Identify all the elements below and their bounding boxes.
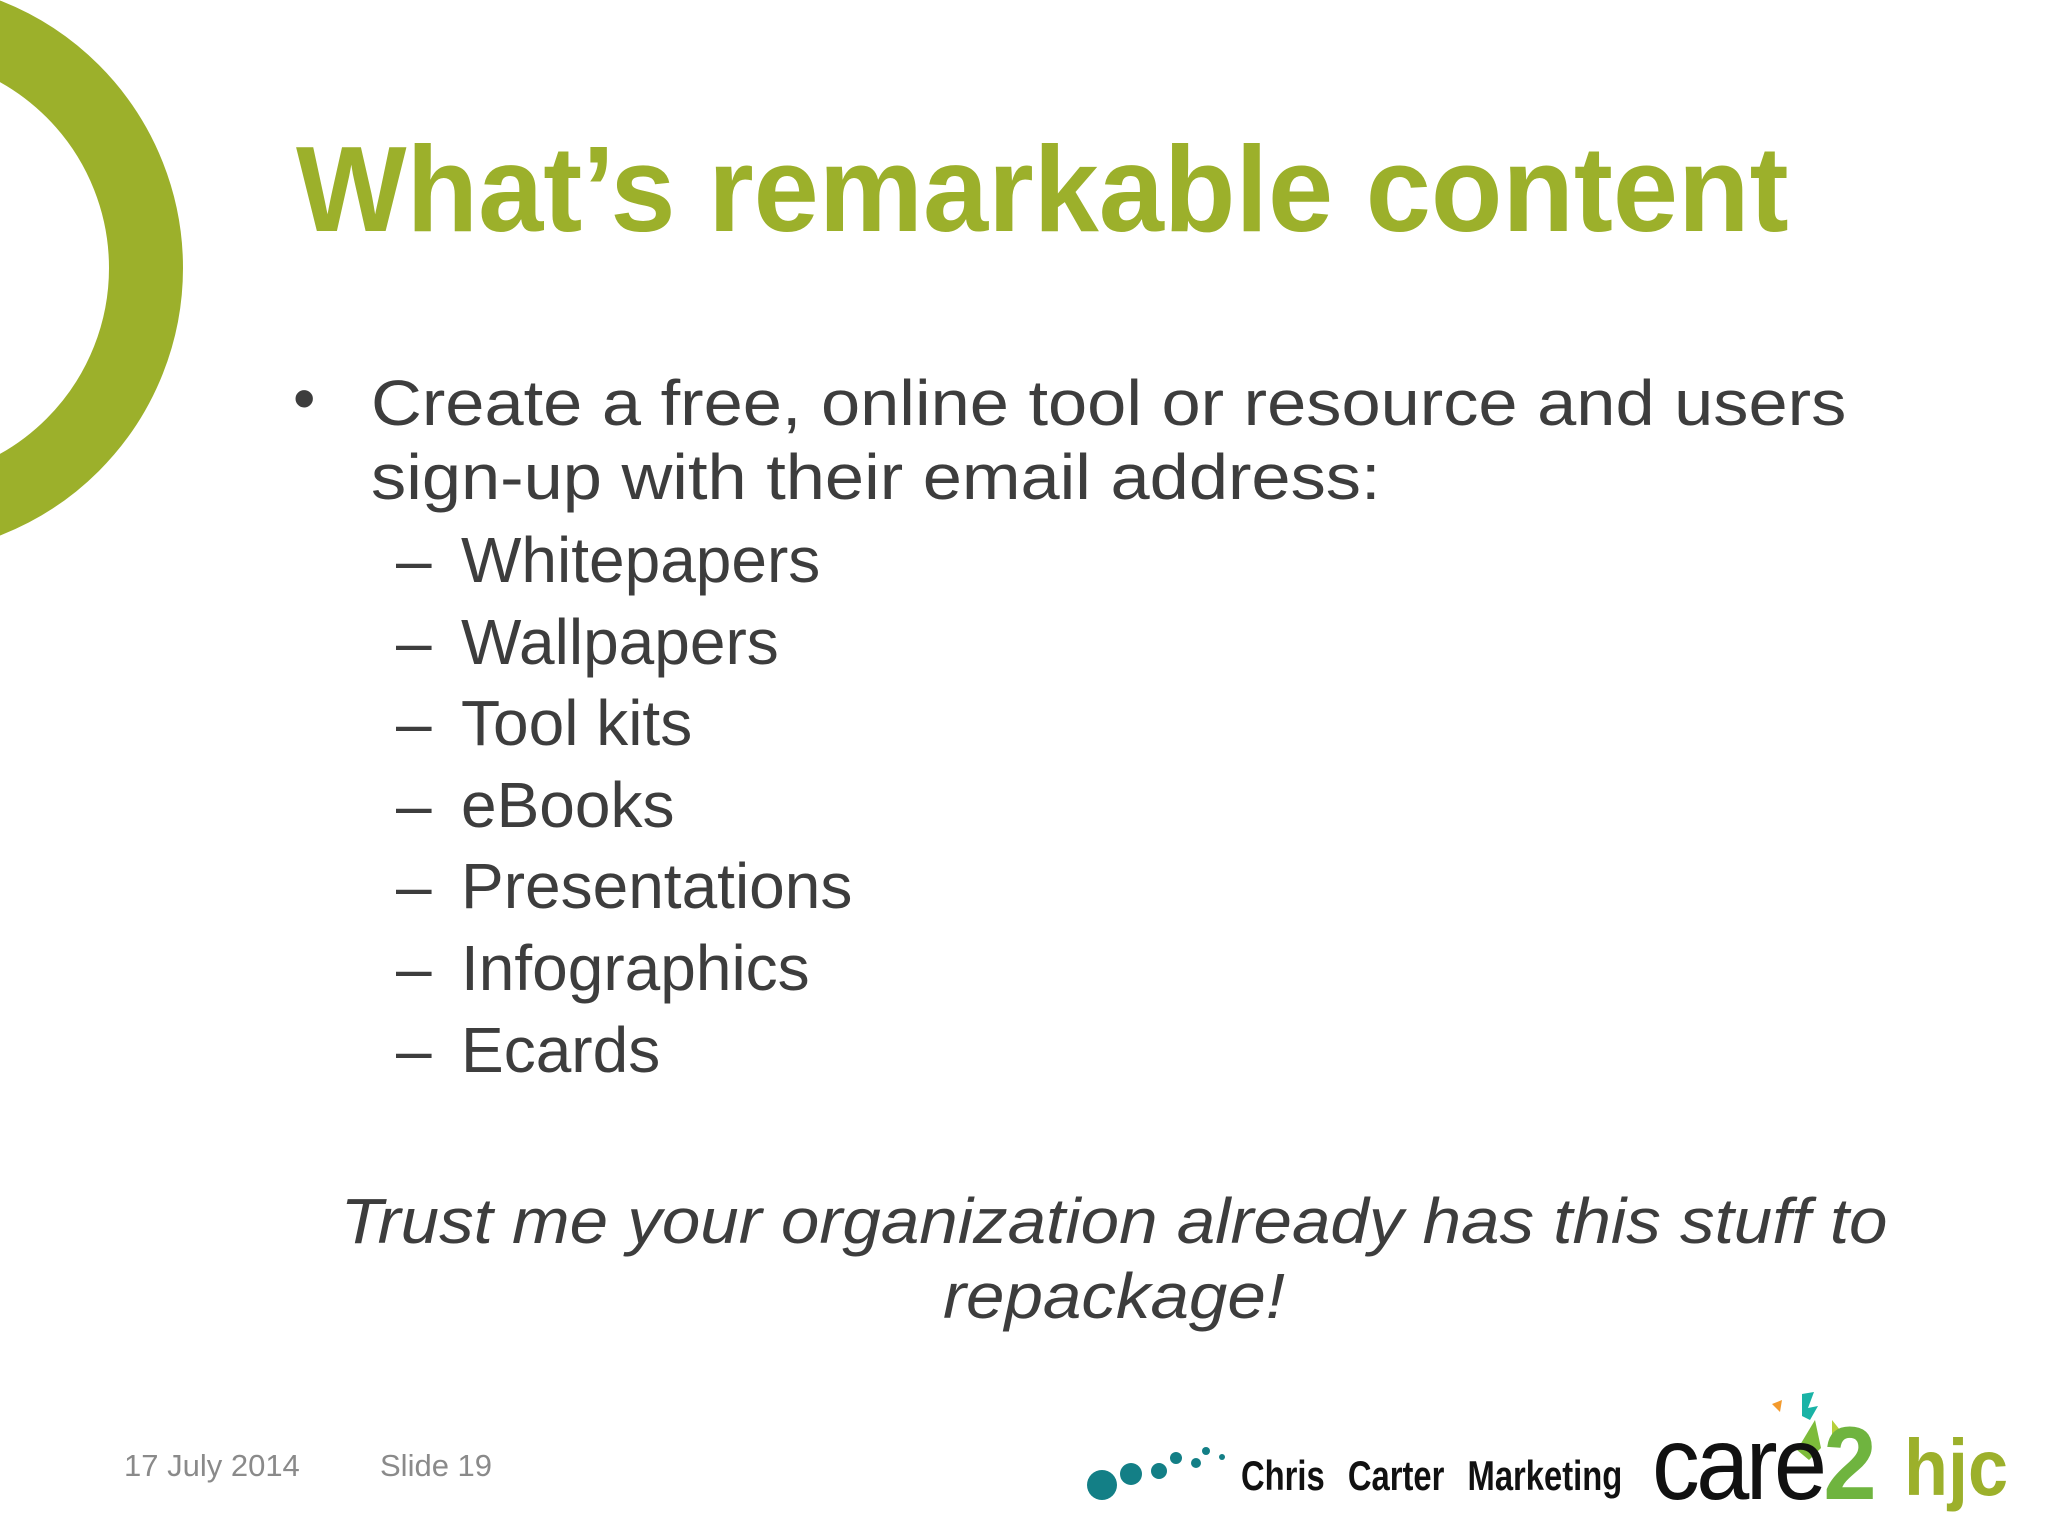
logo: hjc: hjc bbox=[1904, 1423, 2008, 1512]
italic callout: Trust me your organization already has this stuff to repackage! bbox=[341, 1185, 1887, 1332]
logo: chris carter marketing: Chris Carter Marketing bbox=[1241, 1452, 1622, 1499]
sub list: – bbox=[396, 606, 432, 678]
sub list: – bbox=[396, 1014, 432, 1086]
title: What’s remarkable content bbox=[296, 121, 1789, 257]
bullet text block: Infographics bbox=[461, 932, 810, 1004]
logo: care2: care2 bbox=[1652, 1406, 1873, 1522]
icon: butterflies bbox=[1772, 1392, 1839, 1460]
bullet text block: Ecards bbox=[461, 1014, 660, 1086]
bullet text block: eBooks bbox=[461, 769, 674, 841]
bullet text block: Whitepapers bbox=[461, 524, 820, 596]
footer date: 17 July 2014 bbox=[124, 1448, 300, 1483]
sub list: – bbox=[396, 932, 432, 1004]
sub list: – bbox=[396, 687, 432, 759]
logo: chris carter marketing bbox=[1087, 1447, 1622, 1500]
bullet text block: Wallpapers bbox=[461, 606, 779, 678]
main bullet text: sign-up with their email address: bbox=[371, 441, 1381, 513]
bullet: • bbox=[293, 362, 315, 434]
main bullet text: Create a free, online tool or resource and users bbox=[371, 367, 1846, 439]
main bullet text bbox=[371, 367, 1846, 513]
bullet text block: Presentations bbox=[461, 850, 852, 922]
sub list bbox=[396, 524, 432, 1086]
sub list: – bbox=[396, 769, 432, 841]
sub list: – bbox=[396, 850, 432, 922]
decorative arc bbox=[0, 0, 183, 536]
sub list: – bbox=[396, 524, 432, 596]
bullet text block bbox=[293, 362, 1846, 1086]
footer slide number: Slide 19 bbox=[380, 1448, 492, 1483]
bullet text block: Tool kits bbox=[461, 687, 692, 759]
